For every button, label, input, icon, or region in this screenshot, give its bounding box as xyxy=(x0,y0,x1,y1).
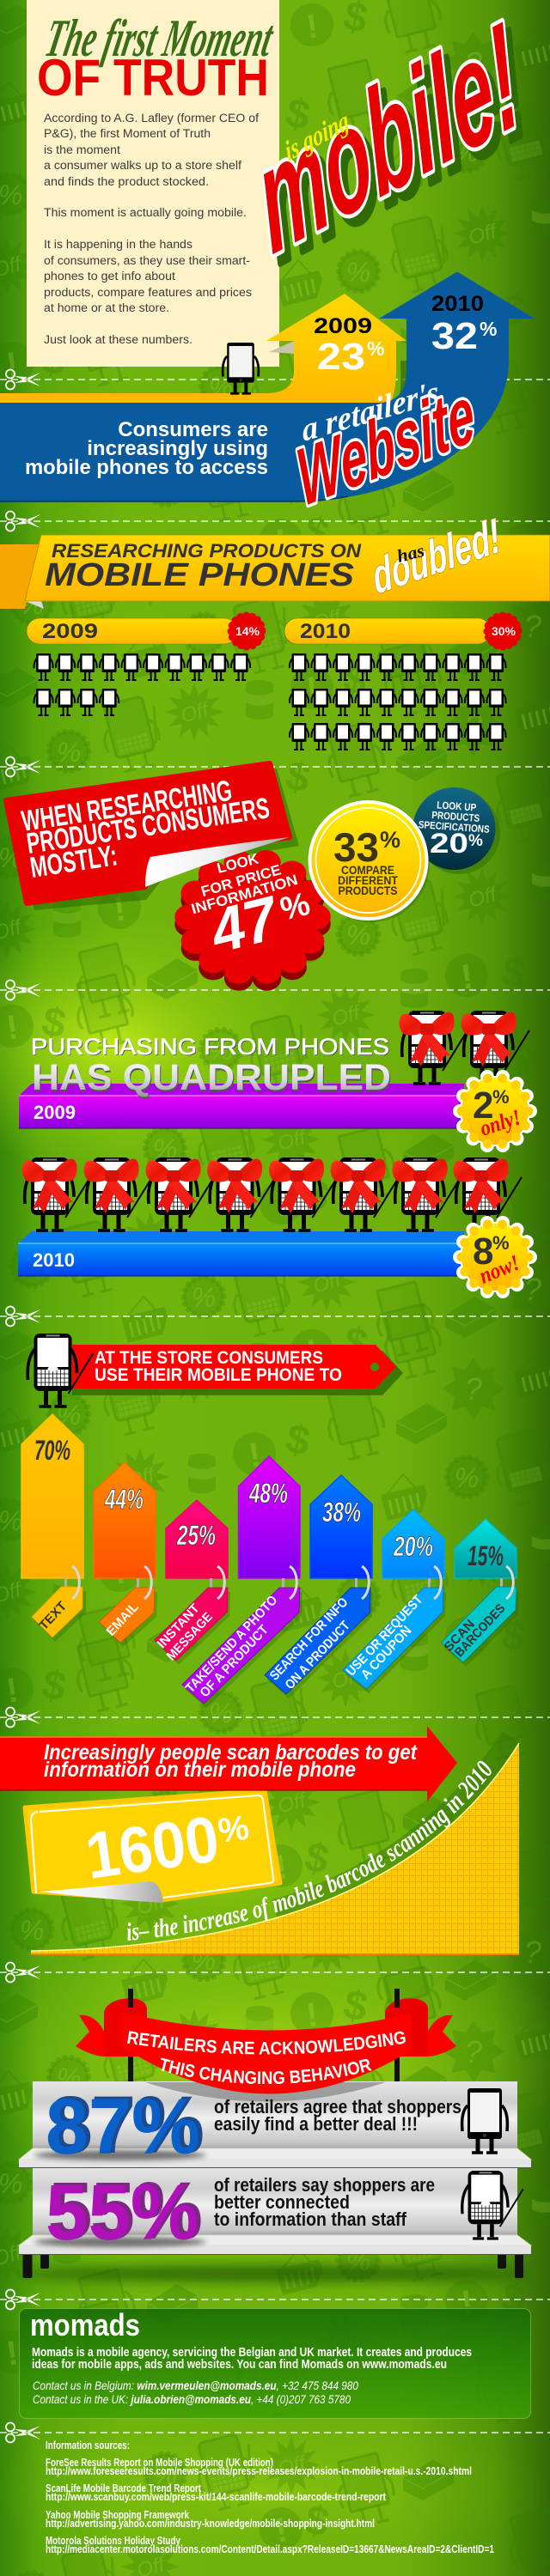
bar: 20 percent use or request a coupon: USE OR REQUEST xyxy=(344,1592,426,1679)
sticker: red heading: WHEN RESEARCHING xyxy=(20,775,234,838)
ribbon banner: THIS CHANGING BEHAVIOR xyxy=(161,2057,372,2084)
badge: 2 percent only: 2 xyxy=(473,1084,493,1127)
information sources: ScanLife Mobile Barcode Trend Report xyxy=(46,2482,202,2494)
heading: HAS QUADRUPLED xyxy=(33,1059,392,1100)
burst: 47 percent look for price information: 47 xyxy=(203,884,286,967)
badge: 30%: 30% xyxy=(492,624,516,638)
icon: phone xyxy=(462,2088,507,2153)
intro text: and finds the product stocked. xyxy=(44,175,209,188)
bar: 70 percent text: 70% xyxy=(34,1435,70,1466)
bar: 20 percent use or request a coupon: 20% xyxy=(393,1531,433,1562)
intro text: P&G), the first Moment of Truth xyxy=(44,127,211,140)
header tag xyxy=(72,1345,403,1395)
intro text: products, compare features and prices xyxy=(44,286,252,299)
bar: 15 percent scan barcodes xyxy=(441,1519,516,1662)
circle: 33 percent compare different products: PRODUCTS xyxy=(339,884,397,897)
bar: 48 percent take or send a photo: TAKE/SEND A PHOTO xyxy=(183,1593,280,1696)
bar: 70 percent text: TEXT xyxy=(36,1599,70,1633)
intro text: According to A.G. Lafley (former CEO of xyxy=(44,112,259,125)
burst: 47 percent look for price information xyxy=(189,850,316,980)
heading: PURCHASING FROM PHONES xyxy=(31,1034,389,1060)
description: ideas for mobile apps, ads and websites. You can find Momads on www.momads.eu xyxy=(32,2358,447,2372)
badge: 14%: 14% xyxy=(235,624,260,638)
bar: 15 percent scan barcodes: SCAN xyxy=(441,1617,478,1655)
information sources: http://www.foreseeresults.com/news-events/press-releases/explosion-in-mobile-retail-u.s.-2010.shtml xyxy=(46,2465,472,2477)
shelf: 2010: 2010 xyxy=(33,1249,75,1271)
badge: 8 percent now: now! xyxy=(475,1250,523,1289)
arrow: blue 2010 xyxy=(0,271,535,501)
bar: 25 percent instant message: INSTANT xyxy=(155,1601,203,1651)
arrow: yellow 2009 xyxy=(0,294,406,403)
contacts xyxy=(33,2379,358,2406)
intro text: is the moment xyxy=(44,143,120,156)
icons: 30 phones xyxy=(290,653,506,750)
stat: 87 percent: 87% xyxy=(46,2083,200,2171)
description xyxy=(32,2346,472,2372)
arrow: blue 2010: 2010 xyxy=(431,292,484,316)
bar: 70 percent text xyxy=(21,1414,83,1637)
circle: 20 percent look up specifications xyxy=(412,787,500,874)
bar: 48 percent take or send a photo: 48% xyxy=(248,1478,288,1509)
burst: 47 percent look for price information: INFORMATION xyxy=(189,872,300,917)
badge: 2 percent only: only! xyxy=(477,1104,524,1141)
arrow: yellow 2009: 23 xyxy=(317,336,365,378)
bar: 20 percent use or request a coupon xyxy=(343,1510,444,1689)
panel: 2010 research 30 percent: 2010 xyxy=(300,620,351,643)
badge: 8 percent now xyxy=(460,1222,530,1292)
intro text: Just look at these numbers. xyxy=(44,333,192,346)
intro text: at home or at the store. xyxy=(44,301,169,314)
contacts: Contact us in Belgium: wim.vermeulen@momads.eu, +32 475 844 980 xyxy=(33,2379,358,2392)
information sources: ForeSee Results Report on Mobile Shopping (UK edition) xyxy=(46,2457,273,2469)
information sources xyxy=(46,2439,494,2555)
panel: 2010 research 30 percent xyxy=(284,616,518,750)
circle: 33 percent compare different products xyxy=(309,802,430,922)
bar: 25 percent instant message: MESSAGE xyxy=(164,1610,216,1663)
bar: 15 percent scan barcodes: BARCODES xyxy=(452,1601,509,1660)
bar: 38 percent search for info: ON A PRODUCT xyxy=(283,1619,353,1692)
banner arrow: scan barcodes: Increasingly people scan barcodes to get xyxy=(44,1741,418,1765)
circle: 33 percent compare different products: DIFFERENT xyxy=(338,873,398,887)
circle: 33 percent compare different products: % xyxy=(380,827,400,853)
circle: 20 percent look up specifications: % xyxy=(468,832,483,850)
header tag: AT THE STORE CONSUMERS xyxy=(95,1347,323,1368)
text: consumers increasingly using: increasingly using xyxy=(87,437,268,460)
badge: 8 percent now: % xyxy=(492,1232,510,1254)
badge: 14% xyxy=(231,616,262,647)
bar: 44 percent email: EMAIL xyxy=(104,1600,142,1639)
shelf: 2009: 2009 xyxy=(34,1102,76,1123)
text: consumers increasingly using xyxy=(25,418,268,479)
information sources: http://advertising.yahoo.com/industry-knowledge/mobile-shopping-insight.html xyxy=(46,2518,375,2530)
bar: 44 percent email: 44% xyxy=(104,1484,144,1515)
badge: 2 percent only xyxy=(460,1076,530,1146)
intro text xyxy=(44,112,259,346)
text: has: has xyxy=(394,540,426,567)
panel: first moment of truth intro xyxy=(27,0,279,367)
intro text: of consumers, as they use their smart- xyxy=(44,254,250,267)
panel: at the store uses xyxy=(21,1334,519,1708)
peel: sticker curl xyxy=(145,837,290,887)
bar: 38 percent search for info xyxy=(265,1475,372,1694)
shelf: 2010 xyxy=(18,1231,464,1276)
information sources: Information sources: xyxy=(46,2439,130,2451)
heading xyxy=(31,1034,392,1100)
stat: 55 percent: to information than staff xyxy=(214,2208,407,2230)
stat: 87 percent xyxy=(34,2081,507,2171)
badge: 30% xyxy=(487,616,518,647)
icons: 14 phones xyxy=(34,653,250,715)
burst: 47 percent look for price information: LOOK xyxy=(216,850,260,877)
stat: 87 percent: easily find a better deal !!! xyxy=(214,2113,418,2135)
icon: phone with keyboard xyxy=(462,2171,523,2239)
bar: 38 percent search for info: SEARCH FOR INFO xyxy=(267,1595,351,1683)
circle: 33 percent compare different products: 33 xyxy=(333,824,379,870)
banner arrow: scan barcodes: information on their mobile phone xyxy=(44,1758,356,1782)
icons: gift phones 2009 xyxy=(400,1011,529,1084)
circle: 20 percent look up specifications: SPECIFICATIONS xyxy=(418,818,490,835)
bar: 38 percent search for info: 38% xyxy=(322,1497,361,1528)
logo: momads: momads xyxy=(30,2307,140,2342)
sticker: 1600 percent xyxy=(25,1790,280,1903)
burst: 47 percent look for price information: FOR PRICE xyxy=(199,861,283,900)
contacts: Contact us in the UK: julia.obrien@momads.eu, +44 (0)207 763 5780 xyxy=(33,2392,351,2406)
arrow: blue 2010: % xyxy=(480,318,497,340)
sticker: 1600 percent: % xyxy=(216,1808,251,1850)
stat: 55 percent: 55% xyxy=(49,2167,202,2255)
ribbon banner xyxy=(76,1989,456,2102)
stat: 87 percent: 87% xyxy=(49,2081,204,2169)
heading text: RESEARCHING PRODUCTS ON xyxy=(52,540,362,562)
stat: 55 percent xyxy=(34,2167,523,2257)
heading: HAS QUADRUPLED xyxy=(32,1057,391,1098)
lower tags xyxy=(34,1591,519,1708)
shelf: 2009 xyxy=(19,1084,464,1128)
arrows: 2009 and 2010 growth xyxy=(0,271,535,524)
bar: 48 percent take or send a photo xyxy=(182,1456,300,1704)
text: a retailer's: a retailer's xyxy=(301,374,441,449)
badge: 2 percent only: % xyxy=(492,1086,510,1108)
badge: 8 percent now: 8 xyxy=(473,1230,493,1273)
bar: 44 percent email xyxy=(94,1462,156,1643)
sticker: red heading: PRODUCTS CONSUMERS xyxy=(25,792,272,860)
heading: PURCHASING FROM PHONES xyxy=(32,1035,390,1060)
bar: 25 percent instant message xyxy=(155,1500,228,1663)
text: consumers increasingly using: Consumers are xyxy=(118,418,268,441)
stat: 55 percent: 55% xyxy=(46,2169,199,2257)
burst: 47 percent look for price information: % xyxy=(277,886,314,928)
intro text: It is happening in the hands xyxy=(44,238,192,251)
shelf unit xyxy=(17,2081,533,2281)
heading: of truth: OF TRUTH xyxy=(37,49,269,106)
chart: growth curve xyxy=(31,1738,519,1955)
panel: barcode scanning 1600 percent xyxy=(0,1726,521,1955)
intro text: This moment is actually going mobile. xyxy=(44,206,247,219)
sticker: red heading xyxy=(4,763,299,910)
stat: 87 percent: of retailers agree that shoppers xyxy=(214,2096,461,2117)
banner: researching products on mobile phones xyxy=(0,507,550,609)
arrow: yellow 2009: % xyxy=(367,337,384,360)
header tag: USE THEIR MOBILE PHONE TO xyxy=(95,1364,342,1385)
circle: 20 percent look up specifications: 20 xyxy=(430,828,468,859)
circle: 33 percent compare different products: COMPARE xyxy=(341,863,394,877)
intro text: a consumer walks up to a store shelf xyxy=(44,159,241,172)
bar: 15 percent scan barcodes: 15% xyxy=(468,1540,504,1571)
information sources: Motorola Solutions Holiday Study xyxy=(46,2535,180,2547)
information sources: http://www.scanbuy.com/web/press-kit/144-scanlife-mobile-barcode-trend-report xyxy=(46,2491,387,2503)
bar: 25 percent instant message: 25% xyxy=(176,1520,216,1551)
bar: 20 percent use or request a coupon: A COUPON xyxy=(358,1624,415,1682)
panel: purchasing has quadrupled xyxy=(18,1011,530,1292)
arrow: blue 2010: 32 xyxy=(431,315,478,357)
sticker: 1600 percent: 1600 xyxy=(82,1802,223,1893)
bar: 48 percent take or send a photo: OF A PRODUCT xyxy=(198,1622,272,1700)
circle: 20 percent look up specifications: PRODUCTS xyxy=(431,809,480,824)
caption on curve: is– the increase of mobile barcode scanning in 2010 xyxy=(127,1760,492,1941)
arrow: yellow 2009: 2009 xyxy=(314,314,372,338)
panel: when researching products xyxy=(4,763,500,980)
banner arrow: scan barcodes xyxy=(0,1726,457,1801)
intro text: phones to get info about xyxy=(44,270,175,283)
banner: researching products on mobile phones: MOBILE PHONES xyxy=(45,557,354,593)
headline: is going mobile xyxy=(244,0,539,295)
panel: momads contact xyxy=(19,2307,531,2418)
panel: retailers shelves xyxy=(17,1989,533,2289)
stat: 55 percent: better connected xyxy=(214,2191,350,2213)
sticker: red heading: MOSTLY: xyxy=(28,839,119,884)
text: consumers increasingly using: mobile phones to access xyxy=(25,456,268,479)
panel: 2009 research 14 percent xyxy=(27,616,262,715)
information sources: Yahoo Mobile Shopping Framework xyxy=(46,2509,189,2521)
icon: phone character xyxy=(28,1334,93,1406)
icons: gift phones 2010 xyxy=(22,1157,522,1230)
text: is going: is going xyxy=(282,105,351,168)
heading: the first moment: The first Moment xyxy=(40,9,279,68)
icon: phone character xyxy=(223,343,259,393)
ribbon banner: RETAILERS ARE ACKNOWLEDGING xyxy=(127,2031,406,2055)
circle: 20 percent look up specifications: LOOK UP xyxy=(437,799,477,814)
stat: 55 percent: of retailers say shoppers are xyxy=(214,2174,435,2196)
panel: 2009 research 14 percent: 2009 xyxy=(42,620,98,643)
